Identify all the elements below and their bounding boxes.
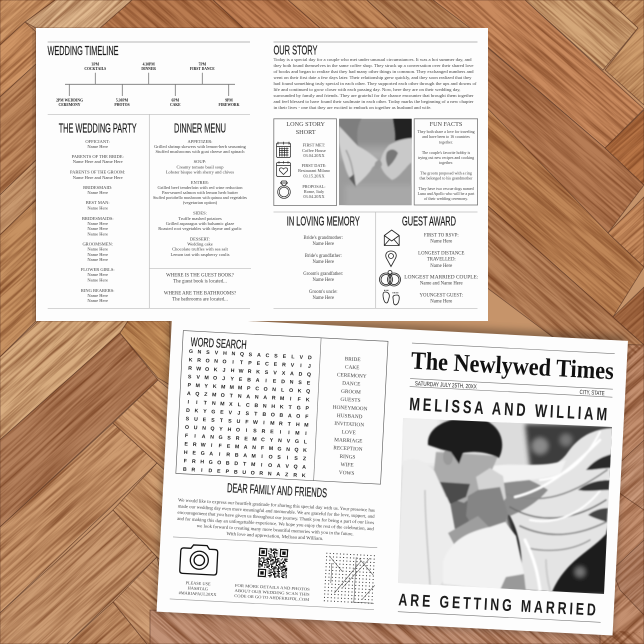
word list: CEREMONY [337, 372, 367, 380]
text block: QR code note [234, 583, 311, 602]
panel: fun facts [414, 119, 478, 205]
text block: guest awards: Name Here [430, 264, 452, 269]
text block: dinner menu: Stuffed mushrooms with goat cheese and spinach [156, 149, 245, 154]
word search letter grid: ERWIFEMANFMGNQK [184, 442, 307, 454]
text block: dinner menu: SIDES: [193, 210, 207, 216]
text block: thank-you message: With love and appreciation, Melissa and William. [226, 532, 323, 542]
word list: MARRIAGE [334, 437, 363, 445]
text block: guest awards: Name and Name Here [420, 282, 463, 286]
heading: dinner menu: DINNER MENU [174, 120, 226, 136]
text block: wedding party list: Name Here [87, 272, 108, 277]
text block: wedding party list: OFFICIANT: [85, 139, 110, 144]
word list: DANCE [342, 381, 361, 388]
word list: BRIDE [345, 356, 361, 363]
word list: RINGS [339, 454, 356, 461]
word search letter grid: HEGAIRBAMIOSISZ [184, 450, 307, 462]
text block: wedding party list: Name Here [87, 190, 108, 195]
panel: word search [176, 331, 388, 484]
word list: WIFE [340, 462, 354, 469]
text block: long story facts: 03.04.20XX [303, 194, 326, 199]
text block: dinner menu: APPETIZER: [187, 139, 213, 144]
heading: wedding timeline: WEDDING TIMELINE [48, 44, 118, 58]
text block: wedding party list: Name Here [87, 257, 108, 262]
word search letter grid [183, 349, 312, 479]
word list: HONEYMOON [333, 405, 368, 412]
text block: dinner menu: Stuffed portobello mushroom with quinoa and vegetables [153, 195, 247, 200]
panel: fun facts: together. [439, 140, 453, 144]
text block: our story paragraph: of books and began to realize that they had many other things in common. They exchanged numbers and [274, 69, 474, 74]
chart: wedding timeline: DINNER [141, 67, 156, 71]
text block: dinner menu: Grilled beef tenderloin with red wine reduction [158, 185, 243, 190]
text block: wedding party list: BEST MAN: [86, 200, 110, 205]
chart: wedding timeline: 6PM [172, 98, 180, 102]
chart: wedding timeline: FIREWORK [219, 103, 240, 107]
panel: outside spread of the program [157, 317, 629, 636]
text block: dinner menu: Chocolate truffles with sea salt [172, 246, 229, 252]
icon: calendar [276, 142, 290, 158]
word search letter grid: KRONOITPECERVIJ [189, 357, 311, 370]
word search letter grid: IITNMXLCBNHKTGP [187, 400, 310, 412]
text block: dinner menu: Roasted root vegetables with thyme and garlic [158, 226, 242, 231]
chart: wedding timeline: 9PM [225, 98, 233, 102]
word search letter grid: AQZMOTNANARMIFK [187, 391, 310, 403]
text block: in loving memory names: Bride's grandmother: [304, 236, 343, 241]
text: location: CITY, STATE [579, 390, 605, 397]
text block: dinner menu: SOUP: [194, 159, 206, 164]
heading: guest award: GUEST AWARD [402, 213, 456, 228]
text block: QR code note: CODE OR GO TO AHDFKRJFDL.COM [234, 593, 310, 602]
text block: guest book and bathrooms: WHERE ARE THE BATHROOMS? [164, 292, 236, 296]
text block: dinner menu: Grilled asparagus with balsamic glaze [166, 221, 234, 226]
text block: thank-you message: We would like to express our heartfelt gratitude for sharing this special day with us. Your presence has [178, 498, 375, 514]
text block: our story paragraph: life and continued to grow closer with each passing day. Now, here they are on their wedding day, [274, 87, 460, 93]
text block: wedding party list: PARENTS OF THE BRIDE: [72, 154, 124, 159]
masthead rules [398, 343, 615, 622]
icon: envelope [384, 230, 399, 246]
text block: wedding party list: Name Here [87, 293, 108, 298]
chart: wedding timeline [56, 62, 240, 107]
photo: couple kissing [397, 416, 616, 596]
text block: dinner menu: Truffle mashed potatoes [178, 216, 222, 221]
text block: QR code note: FOR MORE DETAILS AND PHOTOS [235, 583, 311, 592]
chart: wedding timeline: 7PM [199, 62, 207, 66]
text block: QR code note: ABOUT OUR WEDDING SCAN THIS [234, 588, 310, 597]
word search letter grid: OUNQYHOISREIIMI [185, 425, 307, 437]
text block: in loving memory names: Name Here [313, 296, 334, 301]
text block: wedding party list: Name Here and Name Here [73, 159, 123, 164]
text block: our story paragraph: they both found themselves in the same coffee shop. They struck up a conversation over their shared love [274, 63, 474, 68]
text block: wedding party list: Name Here [87, 144, 108, 149]
word search letter grid: PMYKMMMPCONLOKQ [187, 383, 310, 395]
text block: long story facts: Rome, Italy [304, 189, 325, 195]
text block: in loving memory names: Name Here [313, 242, 334, 247]
text block: thank-you message: encouragement that you have given us throughout our journey. Thank you for being a part of our lives [177, 511, 374, 526]
text block: guest book and bathrooms [164, 274, 236, 302]
text block: dinner menu: ENTREE: [191, 180, 209, 185]
text block: long story facts [298, 142, 330, 199]
text block: dinner menu: Lobster bisque with sherry and chives [166, 170, 234, 174]
text block: wedding party list: Name Here [87, 298, 108, 303]
text block: guest awards: FIRST TO RSVP: [424, 234, 459, 238]
text block: hashtag [179, 580, 218, 597]
text block: dinner menu: Lemon tart with raspberry coulis [171, 252, 230, 257]
text block: wedding party list: BRIDESMAID: [83, 185, 112, 190]
word list: RECEPTION [333, 445, 363, 453]
text block: long story facts: FIRST DATE: [302, 163, 326, 168]
chart: wedding timeline: COCKTAILS [84, 67, 106, 71]
chart: word search answer key [324, 553, 377, 603]
text block: guest awards: Name Here [430, 300, 452, 304]
text block: guest book and bathrooms: WHERE IS THE GUEST BOOK? [166, 274, 234, 278]
text block: hashtag: HASHTAG [188, 585, 208, 591]
text block: dinner menu: Pan-seared salmon with lemon herb butter [162, 190, 239, 195]
text block: thank-you message [176, 498, 376, 545]
icon: camera [180, 544, 218, 575]
panel: fun facts: They have two rescue dogs named [418, 186, 474, 191]
text block: our story paragraph [274, 57, 477, 110]
text block: in loving memory names: Name Here [313, 278, 334, 283]
word list: LOVE [342, 430, 356, 436]
text block: wedding party list: FLOWER GIRLS: [81, 267, 115, 272]
chart: wedding timeline: 2PM WEDDING [56, 98, 83, 102]
word list: GROOM [341, 389, 361, 396]
text block: dinner menu: (vegetarian option) [183, 200, 218, 205]
text block: guest awards: TRAVELLED: [427, 258, 456, 262]
heading: word search: WORD SEARCH [190, 335, 247, 352]
text block: wedding party list: Name Here [87, 226, 108, 231]
text block: dinner menu: Grilled shrimp skewers with lemon-herb seasoning [154, 144, 247, 149]
word search letter grid: GNSVHNQSACSELVD [189, 349, 312, 361]
word list: GUESTS [340, 397, 361, 404]
text block: thank-you message: made our wedding day even more meaningful and memorable. We are grateful for the love, support, and [178, 505, 375, 520]
text block: our story paragraph: and feel blessed to have found their soulmate in each other. Today marks the beginning of a new chapter [274, 99, 474, 104]
text block: wedding party list: PARENTS OF THE GROOM: [70, 170, 125, 174]
chart: wedding timeline: 5.30PM [116, 98, 129, 102]
text block: wedding party list: BRIDESMAIDS: [82, 216, 114, 221]
text block: wedding party list: RING BEARERS: [81, 288, 115, 293]
panel: fun facts: FUN FACTS [430, 121, 463, 128]
heading: our story: OUR STORY [274, 43, 318, 58]
panel: fun facts: The couple's favorite hobby is [422, 150, 471, 155]
text block: in loving memory names: Name Here [313, 260, 334, 265]
word list: VOWS [339, 470, 355, 477]
heading: dear family and friends: DEAR FAMILY AND FRIENDS [227, 480, 328, 500]
photo: linked pinky fingers [339, 118, 415, 207]
chart: wedding timeline: CEREMONY [59, 103, 81, 107]
text block: long story facts: Coffee House [302, 148, 326, 153]
text block: our story paragraph: in their lives - one that they are excited to embark on together as husband and wife. [274, 105, 432, 110]
text block: long story facts: Restaurant Milano [298, 168, 330, 173]
text block: wedding party list: GROOMSMEN: [82, 242, 113, 246]
text block: dinner menu [153, 139, 247, 257]
icon: map pin [386, 251, 396, 266]
text block: guest book and bathrooms: The guest book is located... [173, 280, 227, 284]
text block: guest awards [404, 234, 478, 304]
text block: dinner menu: Wedding cake [187, 242, 213, 246]
text block: wedding party list: Name Here [87, 278, 108, 282]
panel: inside spread of the program [36, 28, 488, 321]
text block: thank-you message: and for making this day an unforgettable experience. We hope you enjoy the rest of the celebration, and [177, 517, 375, 532]
text block: thank-you message: we look forward to creating many more beautiful memories with you in the future. [197, 524, 354, 537]
panel: fun facts: together. [439, 160, 453, 165]
text block: hashtag: PLEASE USE [186, 580, 211, 586]
panel: fun facts: of their wedding ceremony. [424, 196, 468, 201]
panel: long story short [274, 119, 336, 206]
text block: guest awards: YOUNGEST GUEST: [420, 294, 463, 298]
text block: wedding party list [70, 139, 125, 303]
text block: our story paragraph: surrounded by family and friends. They are grateful for the chance encounter that brought them together [274, 93, 474, 98]
panel: fun facts: trying out new recipes and cooking [418, 155, 474, 160]
word search letter grid: BRIDEPBUORNAZRK [183, 467, 306, 479]
text block: guest book and bathrooms: The bathrooms are located... [172, 298, 228, 302]
text block: in loving memory names: Bride's grandfather: [305, 254, 342, 259]
chart: wedding timeline: 4.30PM [143, 62, 155, 66]
word search letter grid: RWOKJHWRKSVXADQ [188, 366, 311, 378]
chart: wedding timeline: PHOTOS [114, 103, 130, 107]
panel: fun facts: Luna and Apollo who will be a part [418, 191, 475, 196]
text block: wedding party list: Name Here [87, 232, 108, 236]
text block: in loving memory names [303, 236, 343, 301]
text block: in loving memory names: Groom's grandfather: [303, 272, 343, 277]
icon: diamond ring [278, 181, 290, 198]
word search letter grid: FIANGSREMCYNVGL [185, 433, 308, 446]
text block: long story facts: FIRST MET: [303, 142, 325, 148]
word list [329, 356, 370, 477]
text block: guest awards: LONGEST DISTANCE [418, 252, 465, 256]
chart: wedding timeline: FIRST DANCE [190, 67, 215, 71]
text block: wedding party list: Name Here [87, 206, 108, 210]
word list: CAKE [345, 365, 360, 371]
text block: wedding party list: Name Here [87, 221, 108, 226]
word search letter grid: FRHGOBDTMIOAVQA [184, 458, 306, 471]
panel: fun facts: and have been to 16 countries [422, 134, 470, 139]
word search letter grid: SVMOJYEBAIEDNSE [188, 374, 311, 387]
panel: fun facts: They both share a love for traveling [417, 129, 475, 134]
text block: in loving memory names: Groom's uncle: [309, 290, 338, 295]
panel: fun facts: that belonged to his grandmother [420, 176, 473, 180]
text block: wedding party list: Name Here [87, 246, 108, 252]
text block: long story facts: PROPOSAL: [302, 184, 326, 189]
text block: our story paragraph: Today is a special day for a couple who met under unusual circumstances. It was a hot summer day, and [274, 57, 472, 63]
text block: guest awards: Name Here [430, 240, 452, 244]
chart: wedding timeline: 3PM [92, 62, 100, 66]
icon: QR code [258, 548, 288, 578]
chart: wedding timeline: CAKE [170, 103, 181, 107]
text block: dinner menu: Creamy tomato basil soup [176, 164, 224, 170]
text block: our story paragraph: went on their first date a few days later. Their relationship grew quickly, and they soon realized that they [274, 75, 472, 81]
word list: INVITATION [334, 421, 364, 429]
heading: in loving memory: IN LOVING MEMORY [287, 213, 360, 228]
text block: long story facts: 03.15.20XX [303, 174, 326, 178]
text block: dinner menu: DESSERT: [190, 236, 210, 242]
panel: long story short: LONG STORY [286, 121, 326, 128]
text block: hashtag: #MARIAPAUL20XX [179, 590, 217, 597]
text block: wedding party list: Name Here [87, 252, 108, 257]
text block: long story facts: 03.04.20XX [303, 153, 326, 158]
icon: wedding rings [380, 270, 400, 286]
word list: HUSBAND [337, 413, 363, 420]
word search letter grid: DKYGEVJSTBOBAOF [186, 408, 308, 420]
icon: baby feet [383, 290, 399, 305]
text block: guest awards: LONGEST MARRIED COUPLE: [404, 276, 478, 280]
panel: fun facts: The groom proposed with a ring [420, 170, 472, 176]
text block: wedding party list: Name Here and Name Here [73, 175, 123, 180]
heading: the wedding party: THE WEDDING PARTY [59, 120, 137, 136]
text block: our story paragraph: had found something truly special in each other. They supported each other through the ups and downs of [274, 81, 477, 86]
title: the newlywed times: The Newlywed Times [410, 348, 615, 385]
word search letter grid: SUESTSUFWIMRTHM [186, 416, 309, 429]
panel: long story short: SHORT [296, 129, 316, 136]
text: date: SATURDAY JULY 25TH, 20XX [415, 381, 477, 391]
icon: calendar with heart [276, 161, 290, 176]
